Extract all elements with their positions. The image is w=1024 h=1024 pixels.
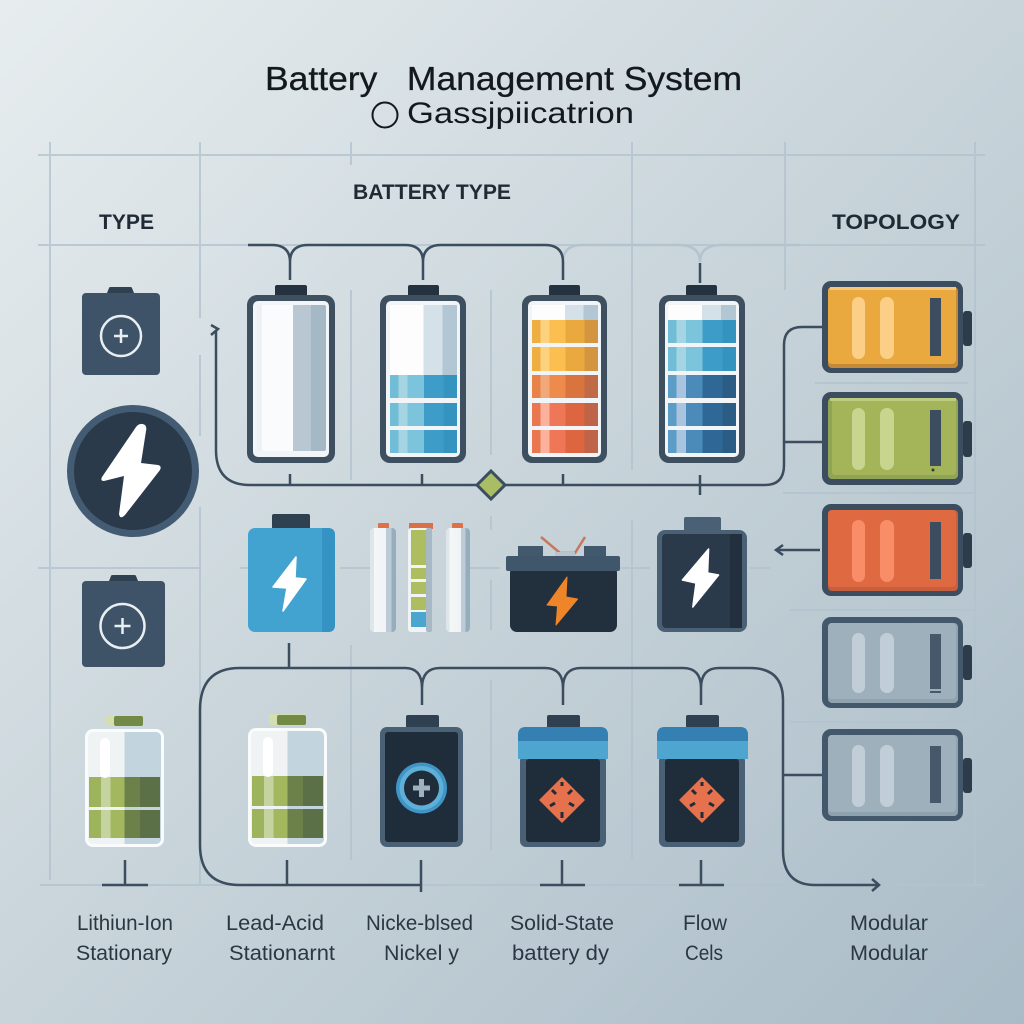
label: solid-state: Solid-State xyxy=(510,912,614,935)
label: flow: Cels xyxy=(685,942,723,965)
icon: cell pack centre xyxy=(408,523,433,632)
heading: topology: TOPOLOGY xyxy=(832,210,960,234)
label: nickel xyxy=(366,912,473,965)
label: lead-acid: Lead-Acid xyxy=(226,912,324,935)
label: lead-acid: Stationarnt xyxy=(229,942,335,965)
icon: plus battery lower xyxy=(82,575,165,667)
connector: top bus xyxy=(248,245,800,283)
battery green xyxy=(822,392,972,485)
battery flow xyxy=(657,715,748,847)
battery orange xyxy=(822,281,972,373)
icon: plus battery top xyxy=(82,287,160,375)
label: lithium-ion xyxy=(76,912,173,965)
panel: battery type gauges xyxy=(247,285,745,463)
battery grey one xyxy=(822,617,972,708)
battery grey two xyxy=(822,729,972,821)
icon: blue battery xyxy=(248,514,335,632)
battery gauge orange full xyxy=(522,285,607,463)
stems under batteries xyxy=(102,860,724,892)
label: lithium-ion: Stationary xyxy=(76,942,172,965)
battery solid-state xyxy=(518,715,608,847)
label: nickel: Nickel y xyxy=(384,942,460,965)
label: lead-acid xyxy=(226,912,335,965)
label: lithium-ion: Lithiun-Ion xyxy=(77,912,173,935)
label: flow xyxy=(683,912,728,965)
battery lead-acid xyxy=(248,714,327,847)
panel: topology batteries xyxy=(822,281,972,821)
label: modular: Modular xyxy=(850,912,928,935)
label: flow: Flow xyxy=(683,912,728,935)
icon: cylinder cell left xyxy=(370,523,396,632)
diamond node xyxy=(477,471,505,499)
subtitle: Gassjpiicatrion xyxy=(407,97,634,130)
arrow: into middle row xyxy=(776,545,820,555)
icon: dark battery xyxy=(657,517,747,632)
label: nickel: Nicke-blsed xyxy=(366,912,473,935)
heading: type: TYPE xyxy=(99,210,154,234)
heading: battery type: BATTERY TYPE xyxy=(353,180,511,204)
battery lithium-ion xyxy=(85,715,164,847)
connector: mid bus with diamond xyxy=(211,325,822,499)
panel: middle battery icons xyxy=(248,514,747,632)
battery gauge blue full xyxy=(659,285,745,463)
panel: bottom row batteries xyxy=(85,714,748,847)
battery red xyxy=(822,504,972,596)
icon: car battery xyxy=(506,537,620,632)
label: modular: Modular xyxy=(850,942,928,965)
connector: lower bus xyxy=(200,643,879,891)
title: Battery Management System xyxy=(265,60,742,97)
label: solid-state: battery dy xyxy=(512,942,610,965)
battery nickel xyxy=(380,715,463,847)
label: solid-state xyxy=(510,912,614,965)
label: modular xyxy=(850,912,928,965)
battery gauge blue low xyxy=(380,285,466,463)
icon: cylinder cell right xyxy=(446,523,470,632)
battery gauge empty xyxy=(247,285,335,463)
icon: lightning badge xyxy=(67,405,199,537)
